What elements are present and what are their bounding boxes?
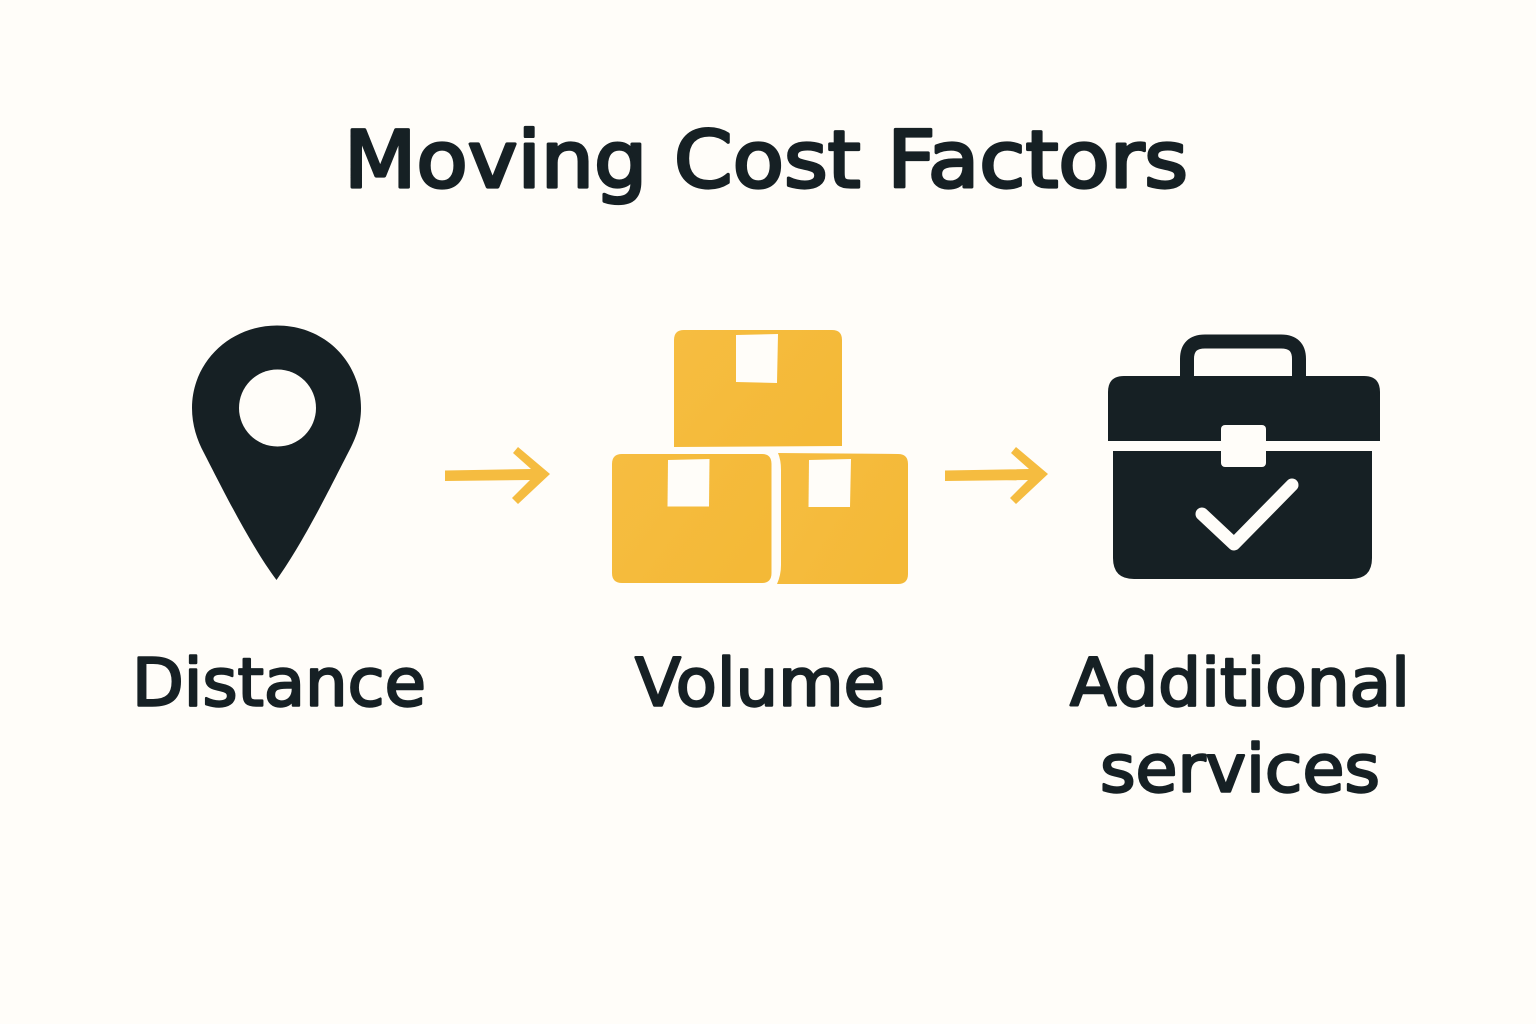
icon: stacked boxes [612, 330, 908, 584]
box: bottom right [777, 453, 908, 584]
icon: briefcase with check [1108, 342, 1380, 579]
arrow: volume to services [945, 447, 1048, 504]
title: Moving Cost Factors [344, 116, 1188, 206]
label: additional services [1070, 644, 1410, 808]
box: top [674, 330, 842, 447]
box: bottom left [612, 454, 772, 583]
label: volume: Volume [635, 644, 885, 722]
arrow: distance to volume [445, 447, 550, 504]
icon: location pin [192, 326, 361, 580]
label: additional services: Additional [1070, 644, 1410, 722]
label: additional services: services [1100, 730, 1380, 808]
label: distance: Distance [132, 644, 426, 722]
